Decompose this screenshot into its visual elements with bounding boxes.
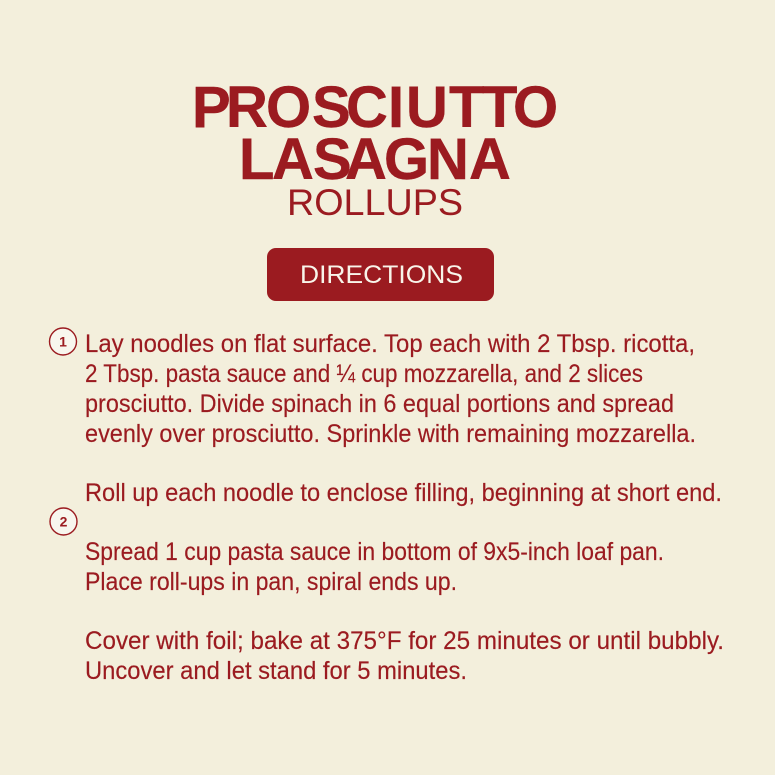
text: step 1 directions: 2 Tbsp. pasta sauce and ¼ cup mozzarella, and 2 slices [85, 360, 643, 388]
text: step 2 directions: Place roll-ups in pan, spiral ends up. [85, 568, 457, 596]
text: step 1 directions: evenly over prosciutto. Sprinkle with remaining mozzarella. [85, 420, 696, 448]
title: LASAGNA [239, 127, 511, 192]
directions badge: DIRECTIONS [300, 261, 463, 289]
icon: step 2 number [50, 508, 77, 535]
text: step 2 directions: Cover with foil; bake at 375°F for 25 minutes or until bubbly. [85, 627, 724, 655]
icon: step 1 number: 1 [59, 334, 67, 350]
text: step 1 directions: prosciutto. Divide spinach in 6 equal portions and spread [85, 390, 674, 418]
directions badge [267, 248, 494, 301]
icon: step 2 number: 2 [60, 514, 68, 530]
title [192, 75, 558, 223]
text: step 1 directions: Lay noodles on flat surface. Top each with 2 Tbsp. ricotta, [85, 330, 695, 358]
title: PROSCIUTTO [192, 75, 558, 140]
icon: step 1 number [50, 328, 76, 355]
text: step 1 directions [85, 330, 696, 448]
text: step 2 directions: Uncover and let stand for 5 minutes. [85, 657, 467, 685]
text: step 2 directions: Spread 1 cup pasta sauce in bottom of 9x5-inch loaf pan. [85, 538, 664, 566]
text: step 2 directions [85, 479, 724, 685]
title: ROLLUPS [287, 182, 463, 223]
text: step 2 directions: Roll up each noodle to enclose filling, beginning at short end. [85, 479, 722, 507]
